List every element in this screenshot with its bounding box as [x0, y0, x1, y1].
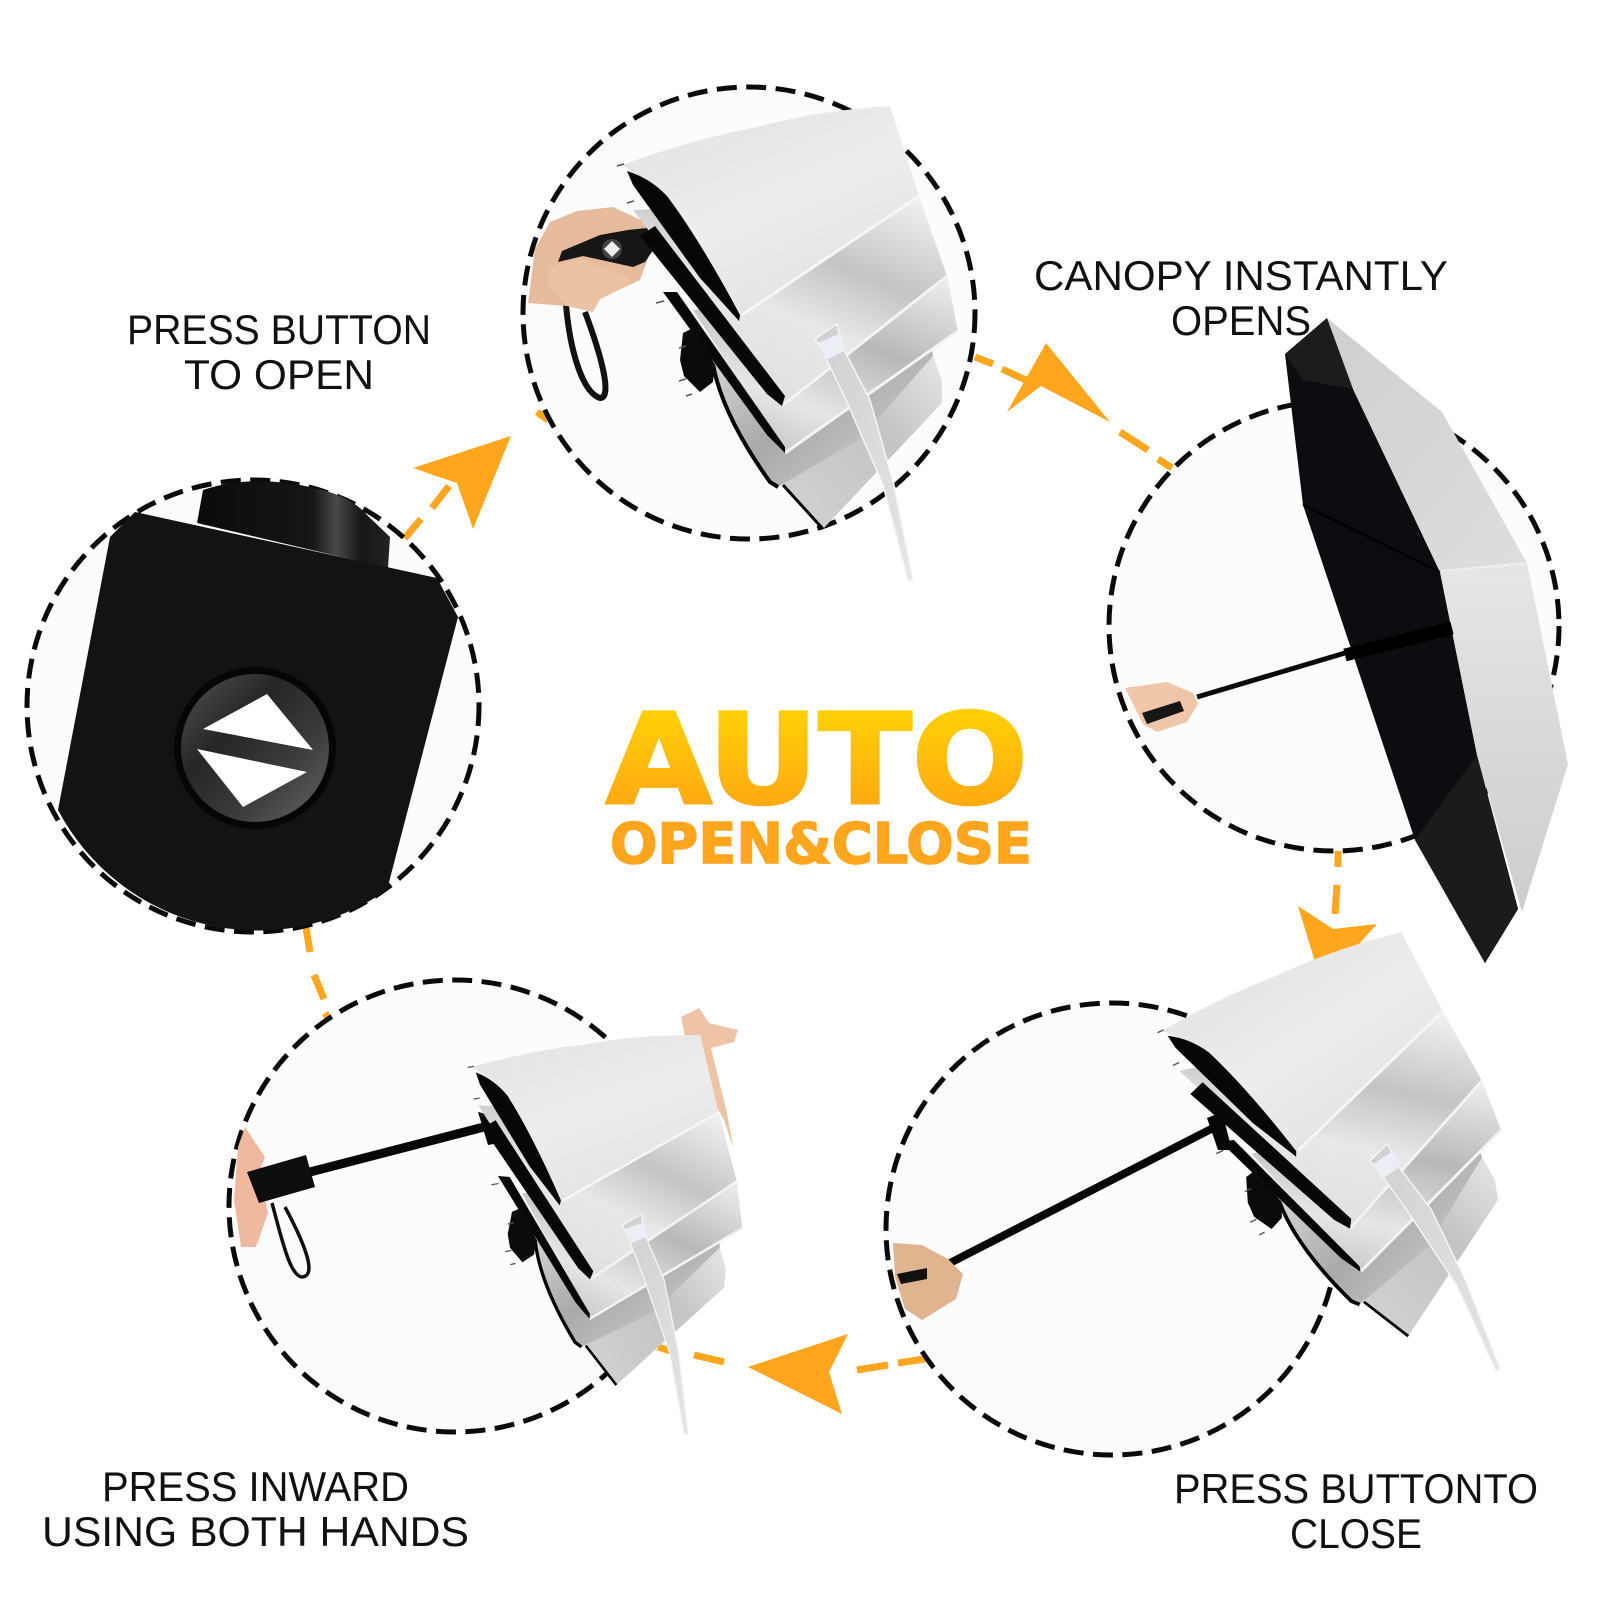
closed umbrella: bottom right step [1148, 921, 1542, 1418]
closed umbrella: bottom left step [440, 1017, 757, 1438]
label: canopy instantly opens [1034, 252, 1448, 344]
subtitle: OPEN&CLOSE: OPEN&CLOSE [610, 812, 1032, 877]
arrow: open button to first step [404, 412, 548, 539]
bottom right step: hand and shaft [893, 1112, 1232, 1320]
label: press button to close [1174, 1465, 1538, 1557]
label: press inward using both hands: USING BOTH HANDS [42, 1508, 469, 1555]
label: press inward using both hands [42, 1463, 469, 1555]
bottom left step: far hand [681, 1008, 738, 1147]
dashed circle: top step [523, 87, 975, 539]
dashed circle: bottom right step [886, 1003, 1338, 1455]
arrow: canopy open to press close [1298, 848, 1377, 985]
closed umbrella: top step [617, 106, 958, 581]
label: press button to open [127, 306, 431, 398]
label: press button to close: CLOSE [1290, 1510, 1422, 1557]
open umbrella with hand [1125, 318, 1568, 963]
dashed circle: right step [1109, 401, 1559, 851]
arrow: press close to press inward [658, 1334, 931, 1414]
bottom left step: near hand, handle, shaft and strap [234, 1112, 500, 1277]
label: press button to close: PRESS BUTTONTO [1174, 1465, 1538, 1512]
label: canopy instantly opens: CANOPY INSTANTLY [1034, 252, 1448, 299]
button [174, 667, 336, 829]
label: canopy instantly opens: OPENS [1171, 297, 1311, 344]
label: press button to open: PRESS BUTTON [127, 306, 431, 353]
arrow: first step to canopy open [975, 343, 1172, 468]
handle close-up with button [58, 481, 458, 931]
arrow: press inward to button [306, 928, 331, 1022]
label: press button to open: TO OPEN [184, 351, 374, 398]
label: press inward using both hands: PRESS INWARD [102, 1463, 409, 1510]
top step: hand, handle and strap [528, 207, 660, 398]
dashed circle: bottom left step [229, 980, 681, 1432]
title: AUTO: AUTO [606, 688, 1028, 833]
dashed circle: left step [27, 480, 479, 932]
